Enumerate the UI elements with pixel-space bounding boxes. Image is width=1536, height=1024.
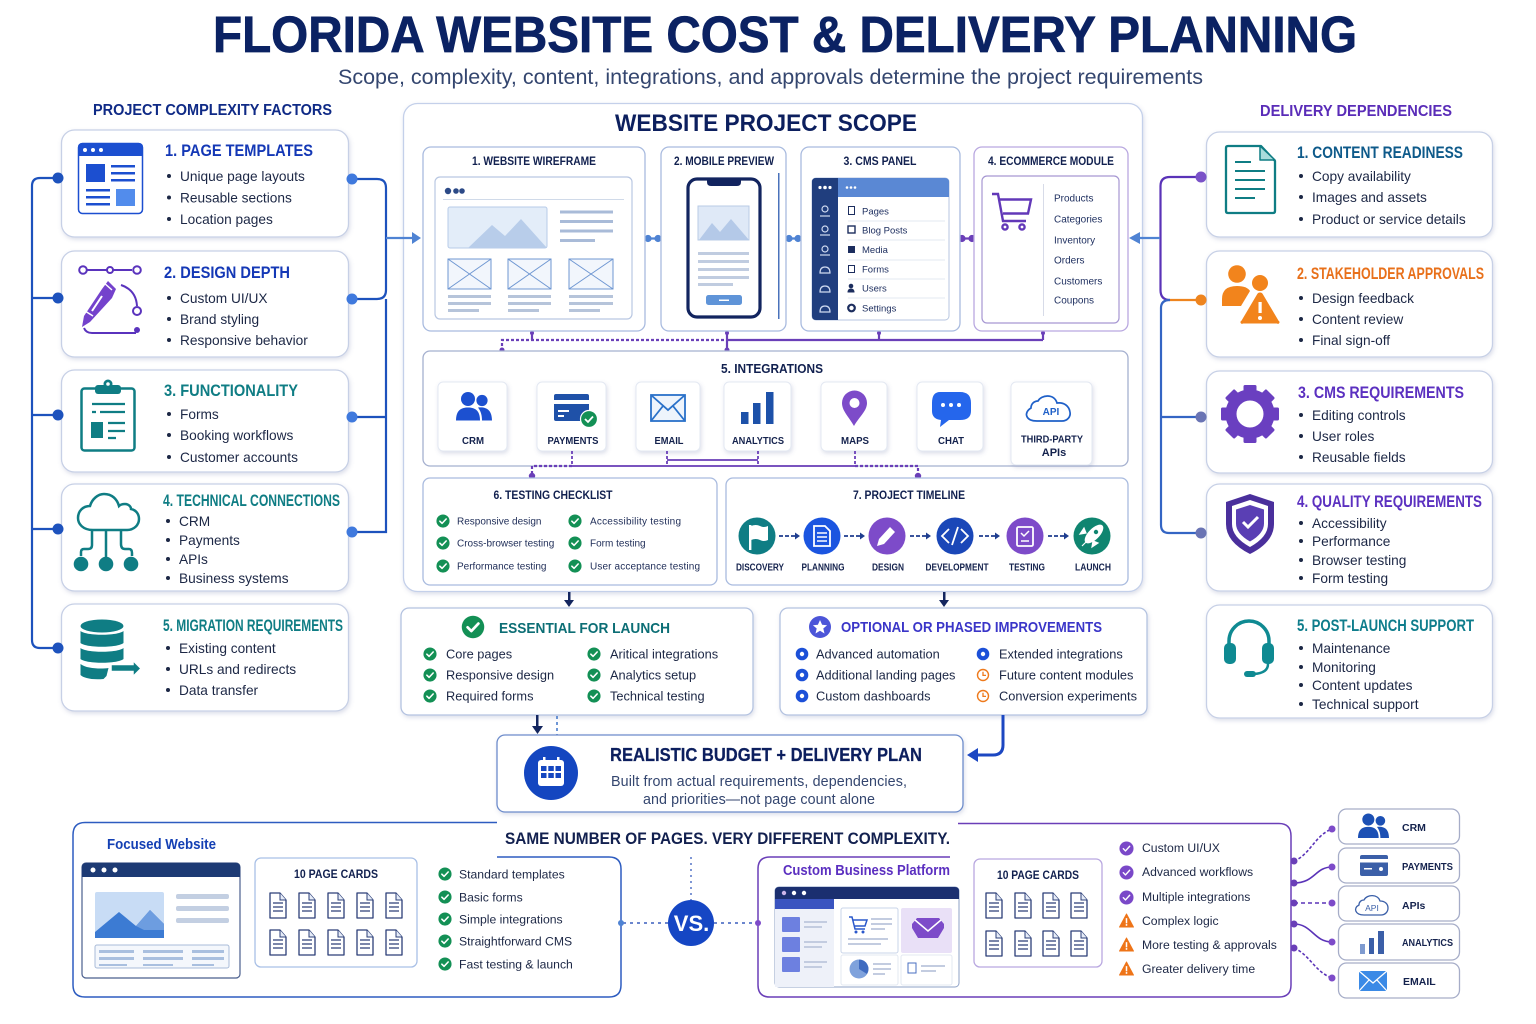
module: testing checklist: Cross-browser testing bbox=[457, 538, 554, 550]
tile: apis bbox=[1338, 886, 1460, 921]
arrows into budget plan bbox=[532, 715, 1003, 762]
panel: custom business platform: Custom Business Platform bbox=[783, 863, 950, 879]
module: integrations bbox=[423, 351, 1128, 466]
checklist: Multiple integrations bbox=[1142, 890, 1250, 904]
icon: api cloud: API bbox=[1043, 407, 1060, 418]
panel: page templates: Location pages bbox=[180, 212, 273, 227]
module: mobile preview: 2. MOBILE PREVIEW bbox=[674, 154, 775, 168]
icon: people with warning bbox=[1222, 265, 1280, 324]
panel: cms requirements bbox=[1206, 371, 1492, 473]
panel: design depth bbox=[62, 251, 348, 357]
module: integrations: APIs bbox=[1042, 447, 1066, 459]
module: website wireframe: 1. WEBSITE WIREFRAME bbox=[472, 154, 596, 168]
tile: payments bbox=[1338, 848, 1460, 883]
icon: map pin bbox=[842, 390, 867, 426]
checklist: Custom UI/UX bbox=[1142, 841, 1220, 855]
panel: technical connections bbox=[62, 484, 348, 591]
panel: essential for launch: Required forms bbox=[446, 688, 533, 704]
panel: realistic budget + delivery plan: REALISTIC BUDGET + DELIVERY PLAN bbox=[610, 745, 922, 765]
connectors between modules bbox=[500, 236, 1045, 352]
icon: gear bbox=[1221, 385, 1279, 443]
module: integrations: CHAT bbox=[938, 436, 964, 447]
module: ecommerce module: Coupons bbox=[1054, 296, 1094, 306]
module: cms panel: Blog Posts bbox=[862, 226, 908, 236]
module: ecommerce module: Orders bbox=[1054, 256, 1085, 266]
panel: optional or phased improvements: Future content modules bbox=[999, 668, 1133, 682]
panel: stakeholder approvals: Design feedback bbox=[1312, 291, 1414, 306]
step: planning bbox=[802, 518, 845, 574]
module: website wireframe bbox=[423, 147, 645, 331]
panel: technical connections: Payments bbox=[179, 533, 240, 548]
step: planning: PLANNING bbox=[802, 562, 845, 574]
panel: optional or phased improvements: Additional landing pages bbox=[816, 668, 955, 682]
module: testing checklist: Responsive design bbox=[457, 516, 542, 528]
panel: technical connections: Business systems bbox=[179, 571, 289, 586]
panel: content readiness: Product or service details bbox=[1312, 212, 1466, 227]
timeline arrows bbox=[779, 532, 1069, 540]
module: ecommerce module: Customers bbox=[1054, 276, 1102, 288]
panel: realistic budget + delivery plan bbox=[497, 735, 963, 812]
panel: cms requirements: User roles bbox=[1312, 429, 1375, 444]
10 page cards: 10 PAGE CARDS bbox=[294, 867, 378, 881]
connectors to platform integrations bbox=[1290, 826, 1336, 982]
module: ecommerce module: 4. ECOMMERCE MODULE bbox=[988, 154, 1114, 168]
module: integrations: 5. INTEGRATIONS bbox=[721, 362, 823, 376]
panel: cms requirements: 3. CMS REQUIREMENTS bbox=[1298, 383, 1464, 402]
panel: design depth: Responsive behavior bbox=[180, 333, 308, 348]
panel: technical connections: CRM bbox=[179, 514, 210, 529]
panel: migration requirements: Existing content bbox=[179, 641, 276, 656]
panel: essential for launch: Aritical integrations bbox=[610, 646, 718, 662]
panel: realistic budget + delivery plan: and priorities—not page count alone bbox=[643, 792, 875, 808]
checklist: Straightforward CMS bbox=[459, 934, 572, 948]
step: discovery: DISCOVERY bbox=[736, 562, 784, 574]
vs connector: VS. bbox=[674, 911, 709, 936]
panel: post-launch support: Monitoring bbox=[1312, 660, 1376, 675]
panel: page templates: Reusable sections bbox=[180, 190, 292, 206]
icon: headset bbox=[1224, 621, 1274, 677]
checklist: Advanced workflows bbox=[1142, 865, 1253, 879]
module: cms panel: Settings bbox=[862, 304, 897, 314]
panel: design depth: Custom UI/UX bbox=[180, 291, 267, 306]
step: testing bbox=[1006, 518, 1045, 574]
tile: payments: PAYMENTS bbox=[1402, 861, 1453, 873]
checklist: Basic forms bbox=[459, 890, 523, 904]
panel: page templates: 1. PAGE TEMPLATES bbox=[165, 141, 313, 160]
checklist: Fast testing & launch bbox=[459, 958, 573, 972]
module: ecommerce module: Categories bbox=[1054, 214, 1102, 226]
module: testing checklist bbox=[423, 478, 717, 585]
icon: calendar bbox=[524, 746, 578, 800]
checklist: More testing & approvals bbox=[1142, 938, 1277, 952]
panel: optional or phased improvements: OPTIONAL OR PHASED IMPROVEMENTS bbox=[841, 619, 1102, 636]
step: testing: TESTING bbox=[1009, 562, 1045, 574]
panel: focused website: Focused Website bbox=[107, 837, 216, 853]
checklist bbox=[438, 867, 573, 972]
step: design bbox=[868, 518, 906, 574]
panel: quality requirements: Accessibility bbox=[1312, 516, 1387, 531]
10 page cards bbox=[255, 858, 417, 967]
panel: page templates bbox=[62, 130, 348, 237]
panel: post-launch support: 5. POST-LAUNCH SUPPORT bbox=[1297, 616, 1474, 635]
panel: post-launch support: Maintenance bbox=[1312, 641, 1390, 656]
module: testing checklist: User acceptance testing bbox=[590, 562, 700, 572]
panel: quality requirements: Performance bbox=[1312, 534, 1390, 549]
heading: project complexity factors: PROJECT COMPLEXITY FACTORS bbox=[93, 102, 332, 119]
module: testing checklist: Accessibility testing bbox=[590, 516, 681, 528]
connectors below integrations bbox=[530, 451, 920, 478]
heading: same number of pages: SAME NUMBER OF PAGES. VERY DIFFERENT COMPLEXITY. bbox=[505, 830, 950, 848]
icon: analytics bbox=[741, 392, 774, 424]
module: integrations: PAYMENTS bbox=[548, 436, 599, 447]
module: testing checklist: 6. TESTING CHECKLIST bbox=[494, 490, 612, 502]
dashboard mockup bbox=[775, 887, 959, 987]
icon: document bbox=[1226, 146, 1275, 213]
module: mobile preview bbox=[661, 147, 786, 331]
module: cms panel: 3. CMS PANEL bbox=[844, 154, 916, 168]
tile: analytics: ANALYTICS bbox=[1402, 937, 1453, 949]
panel: content readiness: Images and assets bbox=[1312, 190, 1427, 205]
panel: migration requirements bbox=[62, 604, 348, 711]
panel: cms requirements: Reusable fields bbox=[1312, 450, 1406, 465]
module: integrations: EMAIL bbox=[654, 436, 684, 447]
panel: migration requirements: URLs and redirects bbox=[179, 662, 296, 677]
icon: shield bbox=[1226, 494, 1274, 554]
icon: chat bubble bbox=[932, 392, 971, 427]
checklist: Complex logic bbox=[1142, 914, 1219, 928]
10 page cards: 10 PAGE CARDS bbox=[997, 868, 1079, 882]
panel: optional or phased improvements: Conversion experiments bbox=[999, 688, 1137, 704]
module: ecommerce module: Inventory bbox=[1054, 236, 1095, 246]
checklist: Standard templates bbox=[459, 868, 565, 882]
panel: functionality: Customer accounts bbox=[180, 450, 298, 465]
browser mockup bbox=[82, 863, 240, 978]
step: design: DESIGN bbox=[872, 562, 904, 574]
panel: page templates: Unique page layouts bbox=[180, 169, 305, 184]
panel: optional or phased improvements bbox=[780, 608, 1147, 715]
module: project timeline: 7. PROJECT TIMELINE bbox=[853, 490, 965, 502]
panel: functionality: 3. FUNCTIONALITY bbox=[164, 381, 299, 400]
module: ecommerce module: Products bbox=[1054, 194, 1093, 204]
subtitle: Scope, complexity, content, integrations, and approvals determine the project requirements bbox=[338, 65, 1203, 89]
vs connector bbox=[618, 857, 761, 946]
panel: essential for launch: Analytics setup bbox=[610, 668, 696, 682]
10 page cards bbox=[974, 859, 1102, 967]
panel: website project scope bbox=[404, 104, 1142, 592]
icon: cloud network bbox=[74, 494, 139, 571]
tile: analytics bbox=[1338, 924, 1460, 960]
icon: database arrow bbox=[80, 620, 141, 679]
tile: crm: CRM bbox=[1402, 822, 1426, 834]
panel: essential for launch: Core pages bbox=[446, 646, 512, 662]
module: cms panel: Media bbox=[862, 245, 889, 256]
icon: api cloud bbox=[1026, 396, 1070, 421]
panel: quality requirements: Browser testing bbox=[1312, 553, 1406, 568]
panel: focused website bbox=[73, 822, 621, 997]
panel: optional or phased improvements: Extended integrations bbox=[999, 646, 1123, 662]
step: development: DEVELOPMENT bbox=[926, 562, 988, 574]
module: cms panel: Pages bbox=[862, 206, 889, 218]
panel: migration requirements: 5. MIGRATION REQUIREMENTS bbox=[163, 616, 343, 635]
arrows from scope to outcomes bbox=[564, 592, 949, 607]
panel: quality requirements: 4. QUALITY REQUIREMENTS bbox=[1297, 492, 1482, 511]
panel: stakeholder approvals: Final sign-off bbox=[1312, 333, 1390, 348]
module: integrations: ANALYTICS bbox=[732, 436, 784, 447]
panel: essential for launch: Responsive design bbox=[446, 668, 554, 682]
module: project timeline bbox=[726, 478, 1128, 585]
checklist: Greater delivery time bbox=[1142, 962, 1255, 976]
icon: design pen bbox=[79, 266, 141, 333]
panel: content readiness: 1. CONTENT READINESS bbox=[1297, 143, 1463, 162]
panel: quality requirements bbox=[1206, 484, 1492, 591]
step: launch bbox=[1074, 518, 1111, 574]
panel: cms requirements: Editing controls bbox=[1312, 408, 1406, 423]
panel: essential for launch: ESSENTIAL FOR LAUNCH bbox=[499, 620, 670, 637]
panel: technical connections: APIs bbox=[179, 552, 208, 567]
panel: essential for launch: Technical testing bbox=[610, 688, 705, 704]
panel: stakeholder approvals bbox=[1206, 251, 1492, 357]
step: launch: LAUNCH bbox=[1075, 562, 1111, 574]
icon: email bbox=[651, 395, 685, 421]
icon: payments bbox=[554, 394, 598, 428]
step: development bbox=[926, 518, 988, 574]
module: testing checklist: Performance testing bbox=[457, 562, 546, 572]
step: discovery bbox=[736, 518, 784, 574]
icon: clipboard bbox=[82, 380, 134, 450]
checklist: Simple integrations bbox=[459, 912, 563, 926]
left connectors bbox=[32, 172, 421, 654]
panel: design depth: Brand styling bbox=[180, 312, 259, 327]
module: cms panel: Forms bbox=[862, 264, 889, 276]
panel: functionality: Booking workflows bbox=[180, 428, 294, 443]
panel: functionality bbox=[62, 370, 348, 472]
panel: stakeholder approvals: Content review bbox=[1312, 312, 1403, 327]
panel: essential for launch bbox=[401, 608, 753, 715]
tile: apis: API bbox=[1365, 903, 1379, 913]
panel: technical connections: 4. TECHNICAL CONNECTIONS bbox=[163, 491, 340, 510]
checklist bbox=[1119, 841, 1277, 976]
icon: crm bbox=[456, 392, 492, 420]
heading: delivery dependencies: DELIVERY DEPENDENCIES bbox=[1260, 103, 1452, 120]
panel: quality requirements: Form testing bbox=[1312, 571, 1388, 586]
module: cms panel bbox=[801, 147, 960, 331]
heading: website project scope: WEBSITE PROJECT SCOPE bbox=[615, 110, 917, 137]
panel: content readiness: Copy availability bbox=[1312, 169, 1411, 184]
panel: functionality: Forms bbox=[180, 407, 219, 422]
panel: optional or phased improvements: Custom dashboards bbox=[816, 688, 931, 704]
tile: email bbox=[1338, 963, 1460, 998]
panel: design depth: 2. DESIGN DEPTH bbox=[164, 263, 290, 282]
right connectors bbox=[1129, 172, 1206, 538]
panel: optional or phased improvements: Advanced automation bbox=[816, 646, 940, 662]
panel: migration requirements: Data transfer bbox=[179, 683, 259, 698]
tile: email: EMAIL bbox=[1403, 976, 1436, 988]
panel: post-launch support bbox=[1206, 605, 1492, 718]
tile: crm bbox=[1338, 809, 1460, 844]
title: FLORIDA WEBSITE COST & DELIVERY PLANNING bbox=[213, 6, 1357, 63]
panel: content readiness bbox=[1206, 132, 1492, 237]
icon: shopping cart bbox=[992, 194, 1031, 230]
module: integrations: THIRD-PARTY bbox=[1021, 434, 1083, 446]
panel: custom business platform bbox=[758, 824, 1291, 997]
panel: realistic budget + delivery plan: Built from actual requirements, dependencies, bbox=[611, 774, 907, 790]
module: cms panel: Users bbox=[862, 284, 887, 294]
panel: post-launch support: Technical support bbox=[1312, 697, 1419, 712]
module: testing checklist: Form testing bbox=[590, 538, 646, 550]
module: ecommerce module bbox=[974, 147, 1128, 331]
panel: post-launch support: Content updates bbox=[1312, 678, 1413, 693]
module: integrations: MAPS bbox=[841, 436, 869, 447]
icon: page layout bbox=[78, 143, 143, 214]
module: integrations: CRM bbox=[462, 436, 484, 447]
tile: apis: APIs bbox=[1402, 900, 1426, 912]
